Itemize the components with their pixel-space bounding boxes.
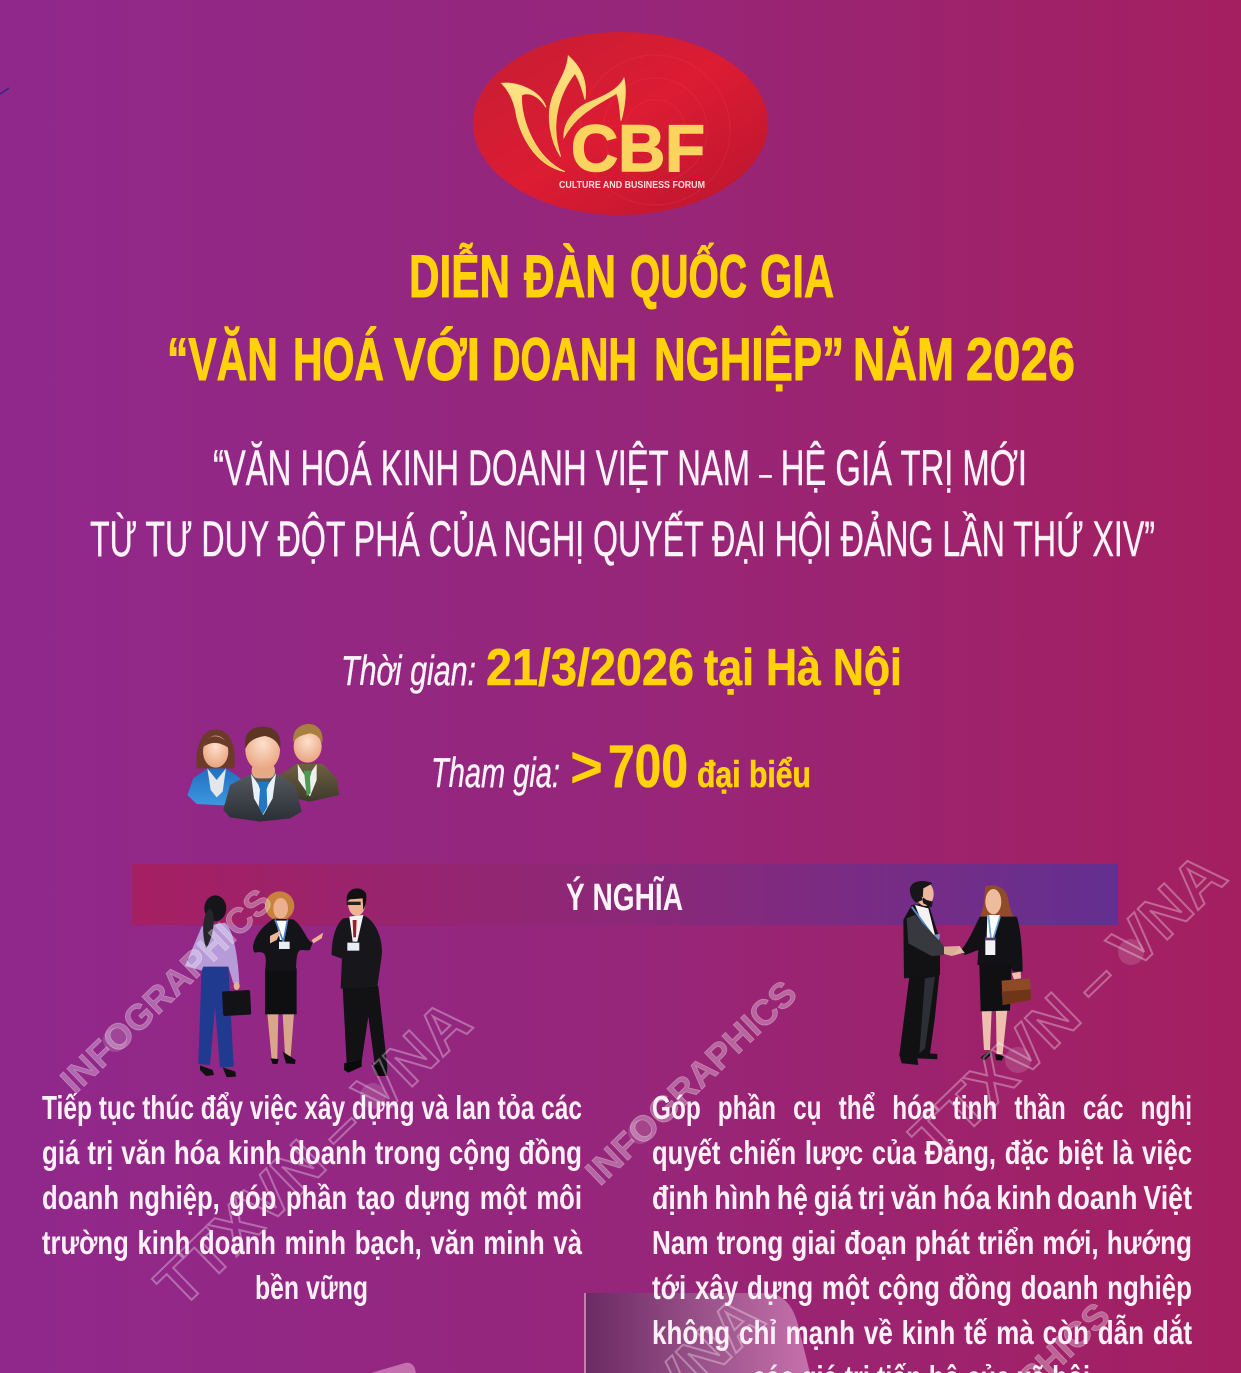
watermark: TTXVN VNA right: TTXVN – VNA	[898, 840, 1239, 1173]
logo letters: CBF	[571, 111, 705, 185]
illustration: three business people	[185, 888, 387, 1077]
businessman	[899, 881, 962, 1065]
title: QUỐC	[630, 243, 747, 310]
icon: three delegates	[187, 724, 339, 822]
event time: Thời gian:	[341, 647, 476, 694]
bottom-left panel fragment	[371, 1363, 416, 1373]
attendance: >	[570, 735, 603, 800]
illustration: business handshake	[899, 881, 1031, 1065]
title: NGHIỆP”	[654, 326, 844, 393]
businesswoman	[953, 885, 1031, 1061]
title: “VĂN	[167, 326, 278, 393]
attendance: đại biểu	[697, 754, 811, 795]
watermark: globes	[103, 939, 1144, 1144]
man on the right	[332, 888, 387, 1076]
event time: tại Hà Nội	[704, 639, 902, 697]
text block: left meaning: Tiếp tục thúc đẩy việc xây dựng và lan tỏa các	[42, 1089, 582, 1126]
title: DOANH	[492, 326, 637, 393]
title: NĂM	[853, 326, 954, 393]
section banner: Ý nghĩa: Ý NGHĨA	[566, 875, 683, 919]
title	[167, 243, 1075, 393]
subtitle: “VĂN HOÁ KINH DOANH VIỆT NAM – HỆ GIÁ TRỊ MỚI	[213, 440, 1027, 496]
text block: left meaning	[42, 1089, 582, 1306]
title: HOÁ	[293, 326, 384, 393]
section banner: Ý nghĩa	[132, 864, 1118, 925]
delegate: man centre	[223, 727, 302, 822]
icon: lotus flame petals	[502, 56, 625, 172]
event time	[341, 639, 902, 697]
bottom panel start	[585, 1293, 810, 1373]
subtitle	[90, 440, 1155, 567]
title: 2026	[966, 326, 1075, 393]
attendance	[431, 733, 811, 800]
text block: left meaning: bền vững	[255, 1269, 368, 1306]
title: GIA	[760, 243, 834, 310]
text block: right meaning	[652, 1089, 1192, 1373]
woman from behind	[185, 895, 251, 1077]
title: DIỄN	[409, 243, 510, 310]
title: VỚI	[394, 326, 480, 393]
text block: left meaning: doanh nghiệp, góp phần tạo dựng một môi	[42, 1179, 582, 1216]
delegate: man right	[280, 724, 339, 802]
delegate: woman left	[187, 729, 241, 805]
title: ĐÀN	[524, 243, 616, 310]
woman in the middle	[253, 891, 323, 1064]
watermark: INFOGRAPHICS centre: INFOGRAPHICS	[577, 972, 805, 1193]
logo: CBF oval	[473, 32, 768, 215]
text block: left meaning: trường kinh doanh minh bạch, văn minh và	[42, 1224, 582, 1261]
attendance: Tham gia:	[431, 749, 560, 796]
attendance: 700	[608, 733, 688, 800]
event time: 21/3/2026	[486, 639, 694, 697]
watermark: INFOGRAPHICS left: INFOGRAPHICS	[52, 880, 280, 1101]
watermark: TTXVN VNA left: TTXVN – VNA	[143, 987, 484, 1320]
logo tagline: CULTURE AND BUSINESS FORUM	[559, 180, 705, 191]
text block: left meaning: giá trị văn hóa kinh doanh trong cộng đồng	[42, 1134, 582, 1171]
